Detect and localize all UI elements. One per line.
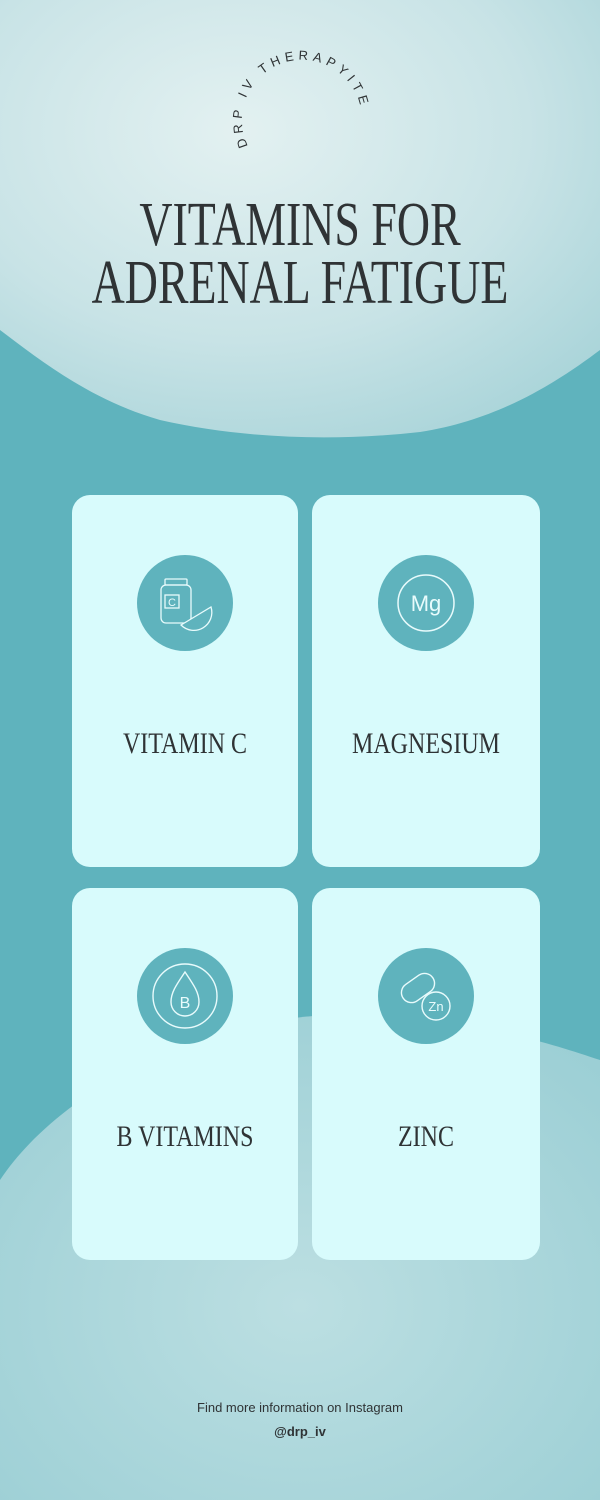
title: ADRENAL FATIGUE xyxy=(92,249,508,317)
title xyxy=(92,191,508,317)
icon: b drop xyxy=(137,948,233,1044)
card: vitamin c: VITAMIN C xyxy=(123,727,247,760)
title: VITAMINS FOR xyxy=(139,191,461,259)
icon: b drop: B xyxy=(180,995,190,1012)
footer text xyxy=(197,1400,403,1439)
icon: zinc pills: Zn xyxy=(428,999,444,1014)
card: magnesium: MAGNESIUM xyxy=(352,727,500,760)
footer text: Find more information on Instagram xyxy=(197,1400,403,1415)
card: zinc: ZINC xyxy=(398,1120,454,1153)
icon: vitamin c: C xyxy=(168,597,176,609)
card: zinc xyxy=(312,888,540,1260)
card: b vitamins: B VITAMINS xyxy=(116,1120,253,1153)
card: magnesium xyxy=(312,495,540,867)
icon: zinc pills xyxy=(378,948,474,1044)
icon: mg: Mg xyxy=(411,591,441,616)
footer text: @drp_iv xyxy=(274,1424,326,1439)
icon: vitamin c xyxy=(137,555,233,651)
card: vitamin c xyxy=(72,495,298,867)
card: b vitamins xyxy=(72,888,298,1260)
brand arc text: DRP IV THERAPYITE xyxy=(232,50,368,148)
icon: mg xyxy=(378,555,474,651)
